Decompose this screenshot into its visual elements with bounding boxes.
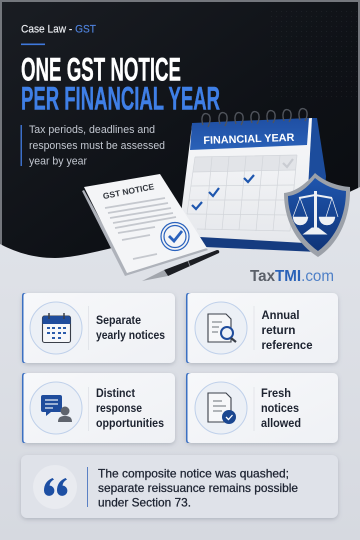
brand wordmark: TaxTMI.com xyxy=(250,268,334,285)
card text xyxy=(96,386,164,430)
card text: allowed xyxy=(261,416,301,430)
document approval stamp xyxy=(161,222,189,250)
calendar grid xyxy=(187,155,297,231)
dot texture xyxy=(270,8,358,98)
panel: annual return reference xyxy=(186,293,338,363)
icon: document search xyxy=(195,302,247,354)
subtitle xyxy=(20,124,165,168)
calendar check marks xyxy=(192,159,293,209)
calendar page xyxy=(181,118,312,243)
illustration: desk calendar xyxy=(181,109,326,252)
callout text xyxy=(98,466,298,510)
panel: distinct response opportunities xyxy=(22,373,175,443)
illustration: GST notice document xyxy=(82,174,208,276)
calendar heading: FINANCIAL YEAR xyxy=(203,132,295,147)
callout text: separate reissuance remains possible xyxy=(98,481,298,495)
card text xyxy=(262,308,313,352)
title: PER FINANCIAL YEAR xyxy=(21,80,220,116)
title xyxy=(21,52,220,116)
icon: pen xyxy=(142,250,219,281)
icon: document approved xyxy=(195,382,247,434)
dark header background xyxy=(2,2,358,258)
document text lines xyxy=(105,198,176,259)
callout: case outcome xyxy=(21,455,338,518)
calendar base xyxy=(198,234,318,252)
subtitle: year by year xyxy=(29,156,87,168)
calendar spiral rings xyxy=(202,109,307,127)
icon: calendar xyxy=(30,302,82,354)
icon: justice shield xyxy=(284,173,350,257)
icon: quotation mark xyxy=(33,465,77,509)
card text: Distinct xyxy=(96,386,135,400)
icon: chat and person xyxy=(30,382,82,434)
eyebrow label: Case Law - GST xyxy=(21,24,96,36)
callout text: The composite notice was quashed; xyxy=(98,466,289,480)
subtitle: Tax periods, deadlines and xyxy=(29,124,155,136)
header frame edge xyxy=(0,0,360,245)
card text xyxy=(96,313,165,342)
card text xyxy=(261,386,301,430)
panel: separate yearly notices xyxy=(22,293,175,363)
calendar header xyxy=(190,118,309,150)
card text: response xyxy=(96,401,142,415)
title: ONE GST NOTICE xyxy=(21,52,181,88)
card text: Fresh xyxy=(261,386,291,400)
card text: yearly notices xyxy=(96,328,165,342)
eyebrow rule xyxy=(21,44,45,45)
document heading: GST NOTICE xyxy=(102,181,155,201)
calendar stand xyxy=(300,118,326,240)
card text: return xyxy=(262,323,296,337)
card text: notices xyxy=(261,401,299,415)
card text: reference xyxy=(262,338,313,352)
panel: fresh notices allowed xyxy=(186,373,338,443)
callout text: under Section 73. xyxy=(98,496,191,510)
card text: Separate xyxy=(96,313,141,327)
subtitle: responses must be assessed xyxy=(29,140,165,152)
card text: opportunities xyxy=(96,416,164,430)
card text: Annual xyxy=(262,308,300,322)
